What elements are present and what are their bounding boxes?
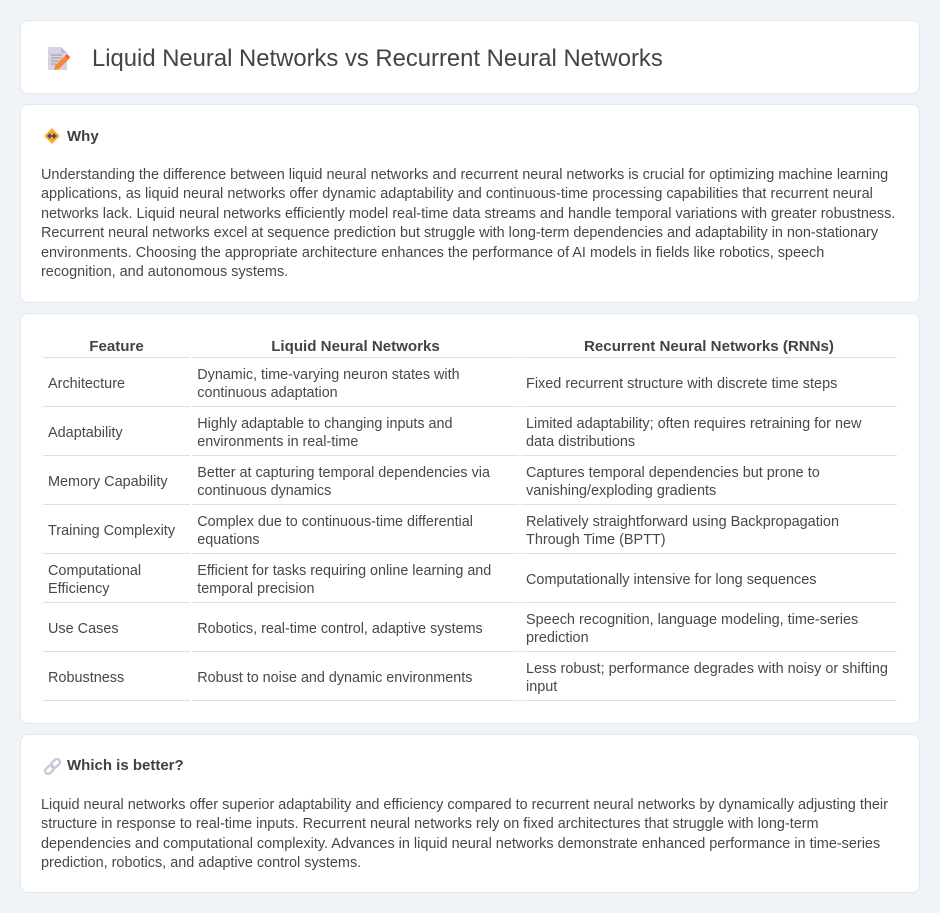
text block: why: Recurrent neural networks excel at sequence prediction but struggle with long-term dependencies and adaptability in non-stationary xyxy=(41,225,878,241)
row: adaptability: data distributions xyxy=(526,434,635,450)
text block: which is better xyxy=(41,797,888,871)
text block: which is better: prediction, robotics, and adaptive control systems. xyxy=(41,855,361,871)
row: computational efficiency: Efficiency xyxy=(48,581,110,597)
row: use cases: Speech recognition, language modeling, time-series xyxy=(526,612,858,628)
row: use cases: prediction xyxy=(526,630,589,646)
row: adaptability xyxy=(48,416,862,450)
text block: why: recognition, and autonomous systems. xyxy=(41,264,288,280)
row: use cases: Use Cases xyxy=(48,621,119,637)
panel: comparison table xyxy=(20,313,920,724)
row: architecture: Dynamic, time-varying neuron states with xyxy=(197,367,460,383)
row: architecture: continuous adaptation xyxy=(197,385,338,401)
row: adaptability: Adaptability xyxy=(48,425,123,441)
text block: why: environments. Choosing the appropriate architecture enhances the performance of AI models in fields like robotics, speech xyxy=(41,244,824,260)
panel: title header xyxy=(20,20,920,94)
icon: chain link xyxy=(44,758,61,775)
table header: recurrent neural networks: Recurrent Neural Networks (RNNs) xyxy=(584,338,834,355)
row: architecture: Fixed recurrent structure with discrete time steps xyxy=(526,376,837,392)
row: architecture: Architecture xyxy=(48,376,125,392)
icon: diamond sign xyxy=(44,128,60,144)
row: architecture xyxy=(48,367,837,401)
row: training complexity: equations xyxy=(197,532,260,548)
row: memory capability: continuous dynamics xyxy=(197,483,331,499)
row: robustness: Less robust; performance degrades with noisy or shifting xyxy=(526,661,888,677)
row: memory capability: vanishing/exploding gradients xyxy=(526,483,716,499)
text block: why: Understanding the difference between liquid neural networks and recurrent neural networks is crucial for optimizing machine learning xyxy=(41,167,888,183)
table header: liquid neural networks: Liquid Neural Networks xyxy=(271,338,440,355)
icon: memo with pencil xyxy=(48,47,70,70)
row: adaptability: Limited adaptability; often requires retraining for new xyxy=(526,416,861,432)
row: memory capability: Memory Capability xyxy=(48,474,168,490)
row: computational efficiency: Computationally intensive for long sequences xyxy=(526,572,817,588)
row: adaptability: Highly adaptable to changing inputs and xyxy=(197,416,452,432)
row: training complexity: Training Complexity xyxy=(48,523,175,539)
text block: why: applications, as liquid neural networks offer dynamic adaptability and continuous-time processing capabilities that recurrent neural xyxy=(41,186,873,202)
row: training complexity: Through Time (BPTT) xyxy=(526,532,666,548)
row: memory capability xyxy=(48,465,820,499)
text block: which is better: Liquid neural networks offer superior adaptability and efficiency compared to recurrent neural networks by dynamically adjusting their xyxy=(41,797,888,813)
text block: why: networks lack. Liquid neural networks efficiently model real-time data streams and handle temporal variations with greater robustness. xyxy=(41,206,895,222)
row: use cases xyxy=(48,612,858,646)
text block: which is better: structure in response to real-time inputs. Recurrent neural networks rely on fixed architectures that struggle with long-term xyxy=(41,816,819,832)
panel: why xyxy=(20,104,920,303)
row: robustness xyxy=(48,661,888,695)
row: use cases: Robotics, real-time control, adaptive systems xyxy=(197,621,483,637)
text block: which is better: dependencies and computational complexity. Advances in liquid neural networks demonstrate enhanced performance in time-series xyxy=(41,836,880,852)
row: computational efficiency xyxy=(48,563,817,597)
heading: why: Why xyxy=(67,128,99,145)
row: computational efficiency: temporal precision xyxy=(197,581,314,597)
title: Liquid Neural Networks vs Recurrent Neural Networks xyxy=(92,45,663,72)
row: robustness: Robust to noise and dynamic environments xyxy=(197,670,472,686)
row: computational efficiency: Computational xyxy=(48,563,141,579)
row: memory capability: Captures temporal dependencies but prone to xyxy=(526,465,820,481)
row: adaptability: environments in real-time xyxy=(197,434,358,450)
table header: feature: Feature xyxy=(89,338,144,355)
row: computational efficiency: Efficient for tasks requiring online learning and xyxy=(197,563,491,579)
row: training complexity xyxy=(48,514,839,548)
row: memory capability: Better at capturing temporal dependencies via xyxy=(197,465,490,481)
text block: why xyxy=(41,167,895,280)
row: robustness: input xyxy=(526,679,557,695)
heading: which is better: Which is better? xyxy=(67,757,184,774)
panel: which is better xyxy=(20,734,920,893)
row: training complexity: Complex due to continuous-time differential xyxy=(197,514,473,530)
row: robustness: Robustness xyxy=(48,670,124,686)
row: training complexity: Relatively straightforward using Backpropagation xyxy=(526,514,839,530)
